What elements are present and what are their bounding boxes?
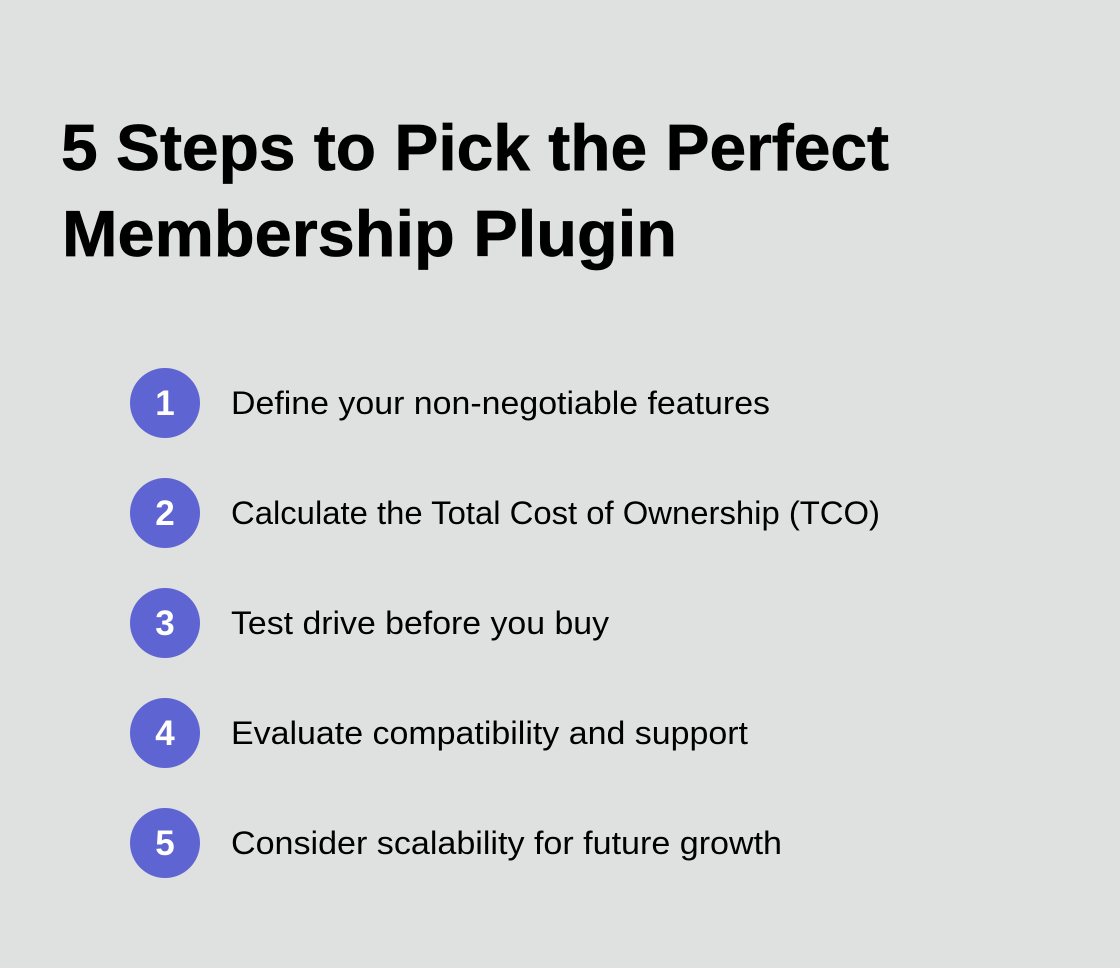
step 1 badge xyxy=(130,368,200,438)
step 4 badge: 4 xyxy=(155,714,175,753)
step 3 text: Test drive before you buy xyxy=(231,605,610,641)
step 1 text: Define your non-negotiable features xyxy=(231,385,770,421)
title: 5 Steps to Pick the Perfect xyxy=(61,111,889,184)
step 2 text: Calculate the Total Cost of Ownership (TCO) xyxy=(231,495,880,531)
step 5 badge xyxy=(130,808,200,878)
step 1 badge: 1 xyxy=(155,384,175,423)
step 3 badge: 3 xyxy=(155,604,175,643)
step 3 badge xyxy=(130,588,200,658)
step 5 text: Consider scalability for future growth xyxy=(231,825,782,861)
step 5 badge: 5 xyxy=(155,824,175,863)
title xyxy=(61,111,889,270)
step 2 badge xyxy=(130,478,200,548)
title: Membership Plugin xyxy=(62,197,677,270)
step 4 badge xyxy=(130,698,200,768)
step 1 xyxy=(130,368,770,438)
step 4 xyxy=(130,698,748,768)
step 4 text: Evaluate compatibility and support xyxy=(231,715,748,751)
step 2 xyxy=(130,478,880,548)
step 2 badge: 2 xyxy=(155,494,175,533)
step 3 xyxy=(130,588,610,658)
step 5 xyxy=(130,808,782,878)
